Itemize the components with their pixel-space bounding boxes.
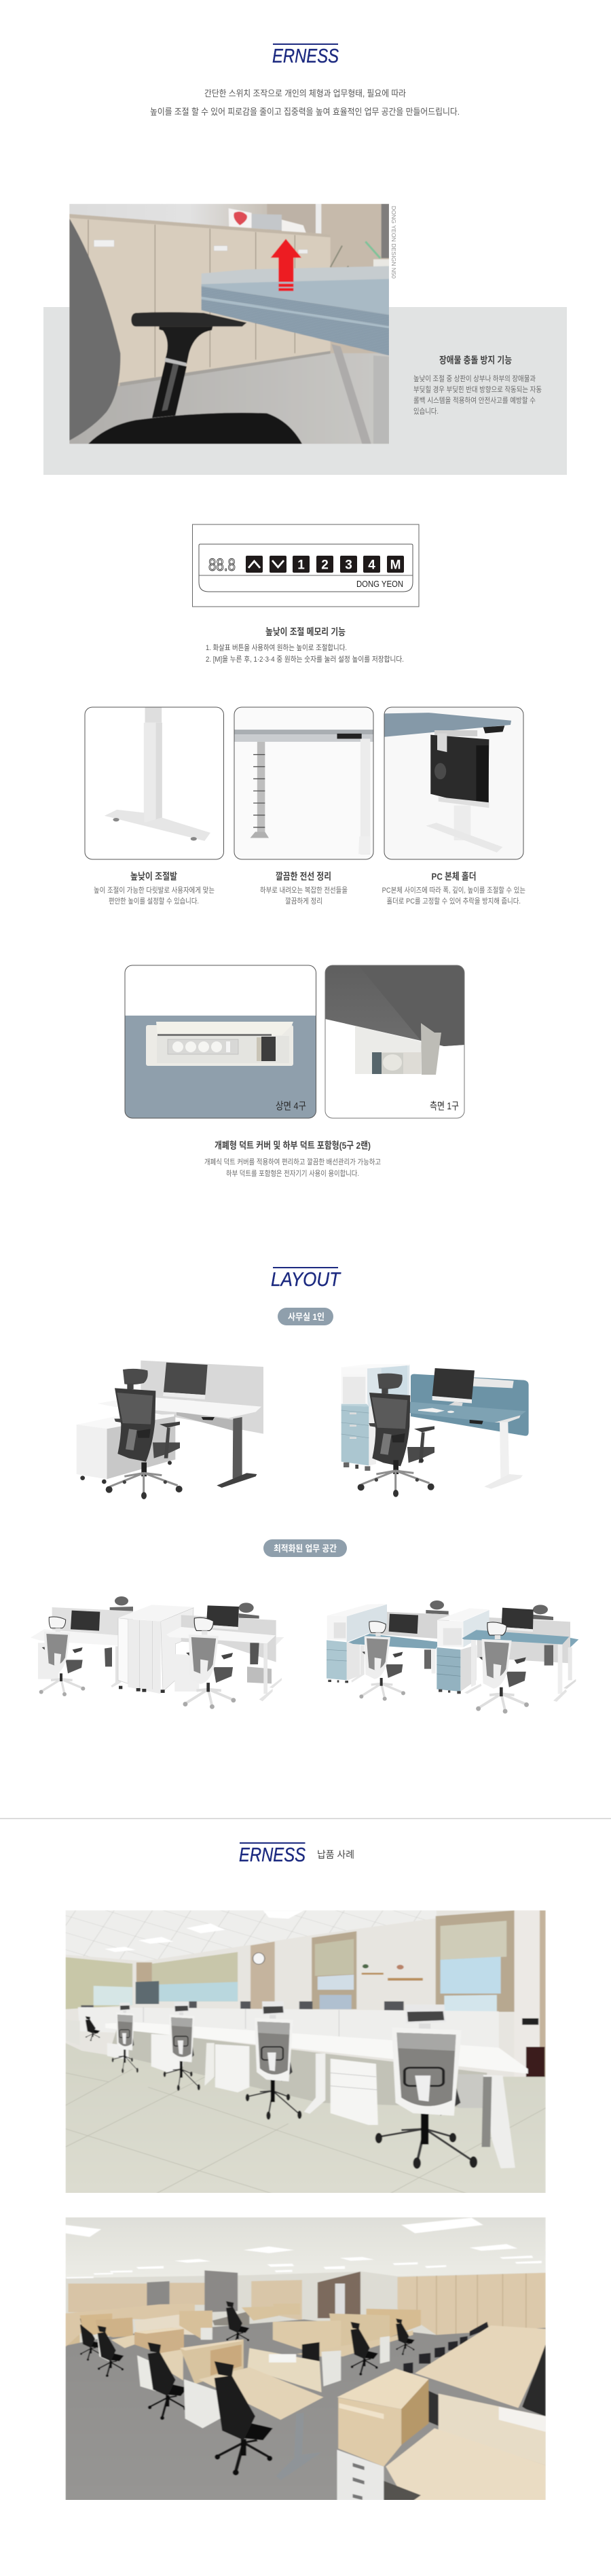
caption: PC holder: PC 본체 홀더 [432, 871, 477, 882]
text block: duct cover [204, 1140, 381, 1178]
photo: installation case 2 [65, 2217, 546, 2501]
intro text: 높이를 조절 할 수 있어 피로감을 줄이고 집중력을 높여 효율적인 업무 공간을 만들어드립니다. [150, 107, 460, 117]
text block: obstacle collision: 장애물 충돌 방지 기능 [439, 355, 512, 365]
caption: height foot: 편안한 높이를 설정할 수 있습니다. [109, 897, 199, 906]
heading: ERNESS case studies: ERNESS [239, 1844, 306, 1866]
card: height adjustable foot [85, 707, 224, 859]
controller buttons: 4 [368, 558, 375, 572]
desk: blue desk with tower [341, 1364, 529, 1497]
heading: ERNESS case studies: 납품 사례 [317, 1849, 354, 1860]
divider [0, 1818, 611, 1819]
card: side outlet: 측면 1구 [430, 1101, 459, 1112]
controller diagram [193, 524, 419, 607]
text block: duct cover: 하부 덕트를 포함형은 전자기기 사용이 용이합니다. [226, 1168, 359, 1178]
intro text [150, 88, 460, 117]
photo: desk collision prevention [69, 204, 389, 444]
pill: office single [278, 1308, 333, 1325]
display digits: 88.8 [208, 556, 236, 575]
controller buttons [246, 556, 404, 573]
controller buttons: 1 [297, 558, 305, 572]
title: ERNESS logo: ERNESS [272, 46, 339, 67]
text block: obstacle collision: 높낮이 조절 중 상판이 상부나 하부의 장애물과 [413, 374, 536, 383]
caption: height foot: 높이 조절이 가능한 다릿발로 사용자에게 맞는 [94, 886, 215, 895]
card: PC holder [384, 707, 523, 859]
text block: memory function: 1. 화살표 버튼을 사용하여 원하는 높이로 조절합니다. [206, 643, 347, 652]
pill: office single: 사무실 1인 [288, 1312, 325, 1322]
text block: memory function: 2. [M]을 누른 후, 1·2·3·4 중 원하는 숫자를 눌러 설정 높이를 저장합니다. [206, 654, 404, 664]
photo: installation case 1 [65, 1910, 546, 2194]
controller buttons: M [390, 558, 401, 572]
text block: duct cover: 개폐식 덕트 커버를 적용하여 편리하고 깔끔한 배선관리가 가능하고 [204, 1157, 381, 1166]
heading: LAYOUT: LAYOUT [271, 1269, 341, 1291]
desk: white desk with gray panel [77, 1361, 263, 1499]
card: side outlet [325, 965, 464, 1118]
controller buttons: 2 [321, 558, 329, 572]
outlet box [146, 1022, 293, 1066]
caption: PC holder: 홀더로 PC를 고정할 수 있어 추락을 방지해 줍니다. [387, 896, 521, 906]
caption: PC holder [382, 871, 525, 906]
card: top outlet [125, 965, 316, 1118]
caption: height foot: 높낮이 조절발 [130, 871, 177, 882]
intro text: 간단한 스위치 조작으로 개인의 체형과 업무형태, 필요에 따라 [204, 88, 406, 99]
text block: obstacle collision: 롤백 시스템을 적용하여 안전사고를 예방할 수 [413, 395, 536, 405]
heading: ERNESS case studies [239, 1842, 354, 1866]
text block: obstacle collision: 있습니다. [413, 407, 439, 416]
card: top outlet: 상면 4구 [276, 1101, 306, 1112]
desk cluster: white [31, 1596, 284, 1709]
card: cable management [234, 707, 373, 859]
caption: cable management: 하부로 내려오는 복잡한 전선들을 [260, 885, 348, 895]
pill: optimized workspace: 최적화된 업무 공간 [274, 1543, 337, 1554]
controller diagram: DONG YEON [356, 579, 403, 589]
caption: cable management: 깔끔하게 정리 [285, 896, 322, 906]
pill: optimized workspace [263, 1539, 347, 1557]
caption: PC holder: PC본체 사이즈에 따라 폭, 깊이, 높이를 조절할 수 있는 [382, 886, 525, 895]
text block: obstacle collision: 부딪힐 경우 부딪힌 반대 방향으로 작동되는 자동 [413, 385, 542, 394]
desk cluster: blue [327, 1600, 578, 1713]
vertical brand label: DONG YEON DESIGN N50 [390, 206, 396, 279]
caption: cable management: 깔끔한 전선 정리 [276, 871, 331, 882]
text block: obstacle collision [413, 355, 542, 416]
controller buttons: 3 [345, 558, 352, 572]
caption: cable management [260, 871, 348, 906]
text block: duct cover: 개폐형 덕트 커버 및 하부 덕트 포함형(5구 2랜) [215, 1140, 371, 1151]
panel: gray backdrop [43, 307, 567, 475]
text block: memory function [206, 626, 404, 664]
text block: memory function: 높낮이 조절 메모리 기능 [265, 626, 346, 637]
caption: height foot [94, 871, 215, 906]
